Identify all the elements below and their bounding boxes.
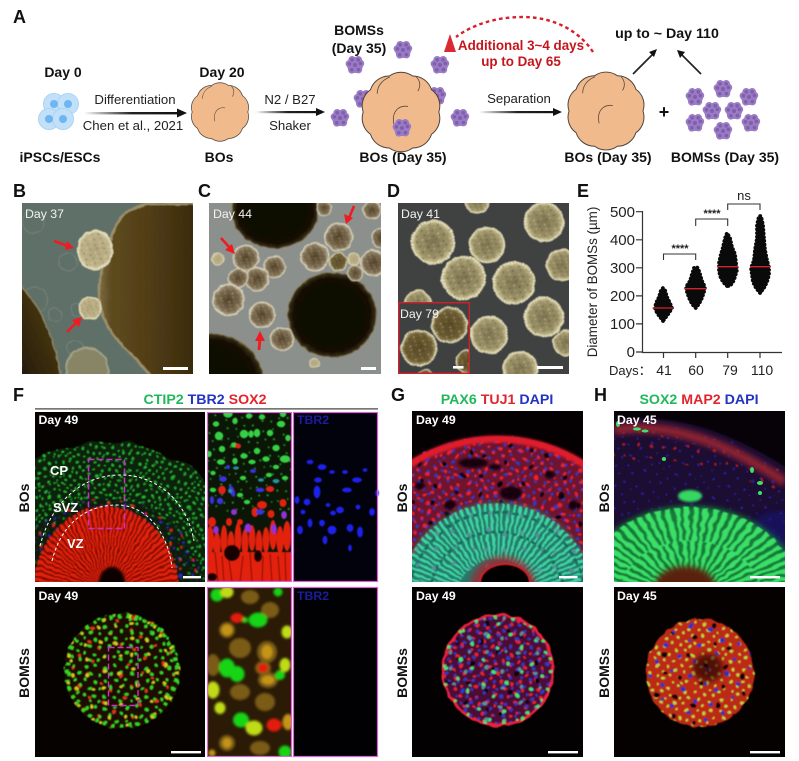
heading: CTIP2 TBR2 SOX2: CTIP2 TBR2 SOX2 xyxy=(143,392,267,408)
label Day 45: Day 45 xyxy=(617,589,657,603)
scale bar xyxy=(750,751,780,753)
y tick labels: 500 xyxy=(610,204,635,221)
icon: separated organoid xyxy=(568,72,644,150)
inset Day 79 xyxy=(398,302,470,374)
magenta crop box xyxy=(88,460,124,528)
scale bar xyxy=(361,367,376,370)
panel A: schematic workflow xyxy=(13,7,779,165)
icon: BOMSs budding around organoid xyxy=(331,41,469,137)
panel F top TBR2 channel xyxy=(293,412,378,582)
scale bar xyxy=(548,751,578,753)
panel C: brightfield Day 44 xyxy=(209,203,381,374)
arrow up right xyxy=(633,49,657,74)
icon: separated BOMSs xyxy=(686,80,760,140)
scale bar xyxy=(171,751,201,753)
panel letter B: B xyxy=(13,181,26,201)
dashed boundary inner xyxy=(52,505,172,568)
scale bar xyxy=(559,576,578,578)
label Day 41: Day 41 xyxy=(401,207,440,221)
blue nuclei xyxy=(295,460,378,551)
label Differentiation: Differentiation xyxy=(94,92,176,107)
significance labels: ns xyxy=(737,188,751,203)
panel letter D: D xyxy=(387,181,400,201)
central dark area xyxy=(693,654,723,682)
green SOX2 fan xyxy=(577,506,799,694)
label Day 20: Day 20 xyxy=(199,64,245,80)
arrow up left xyxy=(677,50,701,74)
panel F top zoom merge xyxy=(206,410,292,582)
label Separation: Separation xyxy=(487,91,551,106)
red arrow lower xyxy=(67,317,82,332)
label Day 37: Day 37 xyxy=(25,207,64,221)
label iPSCs/ESCs: iPSCs/ESCs xyxy=(20,149,101,165)
x tick labels: 41 xyxy=(656,362,672,378)
y tick labels: 100 xyxy=(610,316,635,333)
plus sign: + xyxy=(659,102,669,122)
row label BOs G: BOs xyxy=(394,483,410,512)
green cortical plate xyxy=(35,440,205,582)
scale bar xyxy=(750,576,780,578)
arrow: separation xyxy=(479,108,562,116)
label Day 49: Day 49 xyxy=(38,413,78,427)
dashed boundary outer xyxy=(40,475,194,546)
pink panel border xyxy=(294,412,378,582)
arrow: differentiation xyxy=(84,108,187,118)
red arrow left xyxy=(221,238,235,254)
red ventricular zone fan xyxy=(35,504,180,582)
inset Day 79: Day 79 xyxy=(400,307,439,321)
label BOs Day 35: BOs (Day 35) xyxy=(359,149,447,165)
label TBR2: TBR2 xyxy=(297,413,329,427)
panel F bottom zoom merge xyxy=(206,586,294,758)
labels CP SVZ VZ xyxy=(50,463,84,551)
panel letter E: E xyxy=(577,181,589,201)
heading: PAX6 TUJ1 DAPI: PAX6 TUJ1 DAPI xyxy=(441,392,553,408)
labels CP SVZ VZ: CP xyxy=(50,463,68,478)
x tick labels xyxy=(656,362,773,378)
heading: SOX2 MAP2 DAPI: SOX2 MAP2 DAPI xyxy=(639,392,759,408)
label BOMSs Day 35 xyxy=(332,22,386,56)
icon: large brain organoid Day 35 xyxy=(362,72,440,152)
dim green background cells xyxy=(207,412,292,512)
row label BOMSs F: BOMSs xyxy=(16,648,32,698)
pink panel border xyxy=(208,588,292,756)
x tick labels: 110 xyxy=(751,362,773,378)
teal PAX6 zone xyxy=(412,499,583,582)
significance labels: **** xyxy=(703,208,721,220)
y axis title: Diameter of BOMSs (µm) xyxy=(585,207,600,357)
panel letter G: G xyxy=(391,385,405,405)
panel H top xyxy=(577,411,799,694)
mean lines xyxy=(652,267,771,308)
row label BOs H: BOs xyxy=(596,483,612,512)
label TBR2: TBR2 xyxy=(297,589,329,603)
brightfield image C xyxy=(209,203,381,374)
zoomed nuclei xyxy=(206,410,292,582)
panel E: beeswarm chart xyxy=(577,181,782,378)
y tick labels xyxy=(610,204,635,361)
axes xyxy=(636,211,782,358)
label BOMSs Day 35: (Day 35) xyxy=(332,40,386,56)
data: day 79 xyxy=(719,233,737,286)
significance labels: **** xyxy=(671,243,689,255)
label BOs: BOs xyxy=(205,149,234,165)
y tick labels: 400 xyxy=(610,232,635,249)
BOMS sphere xyxy=(442,614,554,726)
pink panel border xyxy=(294,588,378,756)
red arrow bottom xyxy=(255,331,265,350)
label Day 49: Day 49 xyxy=(38,589,78,603)
BOMS sphere cells xyxy=(64,613,180,729)
scale bar xyxy=(163,367,188,370)
row label BOs F: BOs xyxy=(16,483,32,512)
scale bar xyxy=(183,576,201,578)
label BOs Day 35 right: BOs (Day 35) xyxy=(564,149,652,165)
pink panel border xyxy=(208,412,292,582)
panel F bottom TBR2 channel xyxy=(293,587,378,757)
outer MAP2 and DAPI layer xyxy=(610,418,799,590)
panel F bottom overview xyxy=(35,587,205,757)
label Day 49: Day 49 xyxy=(416,589,456,603)
label Day 44: Day 44 xyxy=(213,207,252,221)
panel G top xyxy=(412,411,583,582)
data: day 41 xyxy=(655,288,672,321)
x tick labels: 79 xyxy=(722,362,738,378)
label N2 / B27: N2 / B27 xyxy=(264,92,316,107)
blue SVZ band xyxy=(35,498,202,582)
label Shaker: Shaker xyxy=(269,118,311,133)
panel H bottom xyxy=(614,587,785,757)
label Chen et al., 2021: Chen et al., 2021 xyxy=(83,118,183,133)
significance brackets xyxy=(664,204,760,260)
BOMS sphere xyxy=(646,619,754,727)
y tick labels: 200 xyxy=(610,288,635,305)
brightfield image B xyxy=(22,203,193,374)
scale bar xyxy=(537,366,563,369)
label BOMSs Day 35 right: BOMSs (Day 35) xyxy=(671,149,779,165)
icon: brain organoid Day 20 xyxy=(191,83,249,141)
labels CP SVZ VZ: SVZ xyxy=(53,500,78,515)
magenta crop box xyxy=(108,648,138,706)
label Day 0: Day 0 xyxy=(44,64,82,80)
data: day 60 xyxy=(686,267,705,308)
row label BOMSs G: BOMSs xyxy=(394,648,410,698)
red arrow top right xyxy=(344,206,354,224)
x tick labels: 60 xyxy=(688,362,704,378)
arrow: shaker culture xyxy=(256,108,325,116)
label BOMSs Day 35: BOMSs xyxy=(334,22,384,38)
panel F top overview xyxy=(35,412,205,582)
panel B: brightfield Day 37 xyxy=(22,203,193,374)
brightfield image D xyxy=(398,203,569,374)
row label BOMSs H: BOMSs xyxy=(596,648,612,698)
dashed return arrow xyxy=(444,17,593,52)
ventricle lumen xyxy=(478,562,532,582)
enlarged nuclei xyxy=(206,586,294,758)
ventricle lumen xyxy=(97,565,127,582)
green upper lobe xyxy=(678,490,702,502)
icon: stem cells xyxy=(38,94,78,130)
y tick labels: 300 xyxy=(610,260,635,277)
significance labels xyxy=(671,188,751,255)
label Days: Days： xyxy=(609,363,652,378)
panel letter H: H xyxy=(594,385,607,405)
label up to Day 110: up to ~ Day 110 xyxy=(615,26,719,42)
icon: BOMSs behind organoid xyxy=(354,87,446,108)
labels CP SVZ VZ: VZ xyxy=(67,536,84,551)
panel letter C: C xyxy=(198,181,211,201)
scattered green cells xyxy=(616,421,763,495)
header rule xyxy=(35,408,378,410)
y tick labels: 0 xyxy=(627,344,635,361)
panel D: brightfield Day 41 xyxy=(398,203,569,374)
outer neuronal layer xyxy=(412,434,583,564)
dark central base xyxy=(655,566,715,606)
label additional days: up to Day 65 xyxy=(481,54,561,69)
panel letter A: A xyxy=(13,7,26,27)
panel G bottom xyxy=(412,587,583,757)
label additional days xyxy=(458,38,584,69)
red arrow upper xyxy=(54,241,74,250)
label Day 49: Day 49 xyxy=(416,413,456,427)
label additional days: Additional 3~4 days xyxy=(458,38,584,53)
data: day 110 xyxy=(751,216,769,293)
panel letter F: F xyxy=(13,385,24,405)
label Day 45: Day 45 xyxy=(617,413,657,427)
